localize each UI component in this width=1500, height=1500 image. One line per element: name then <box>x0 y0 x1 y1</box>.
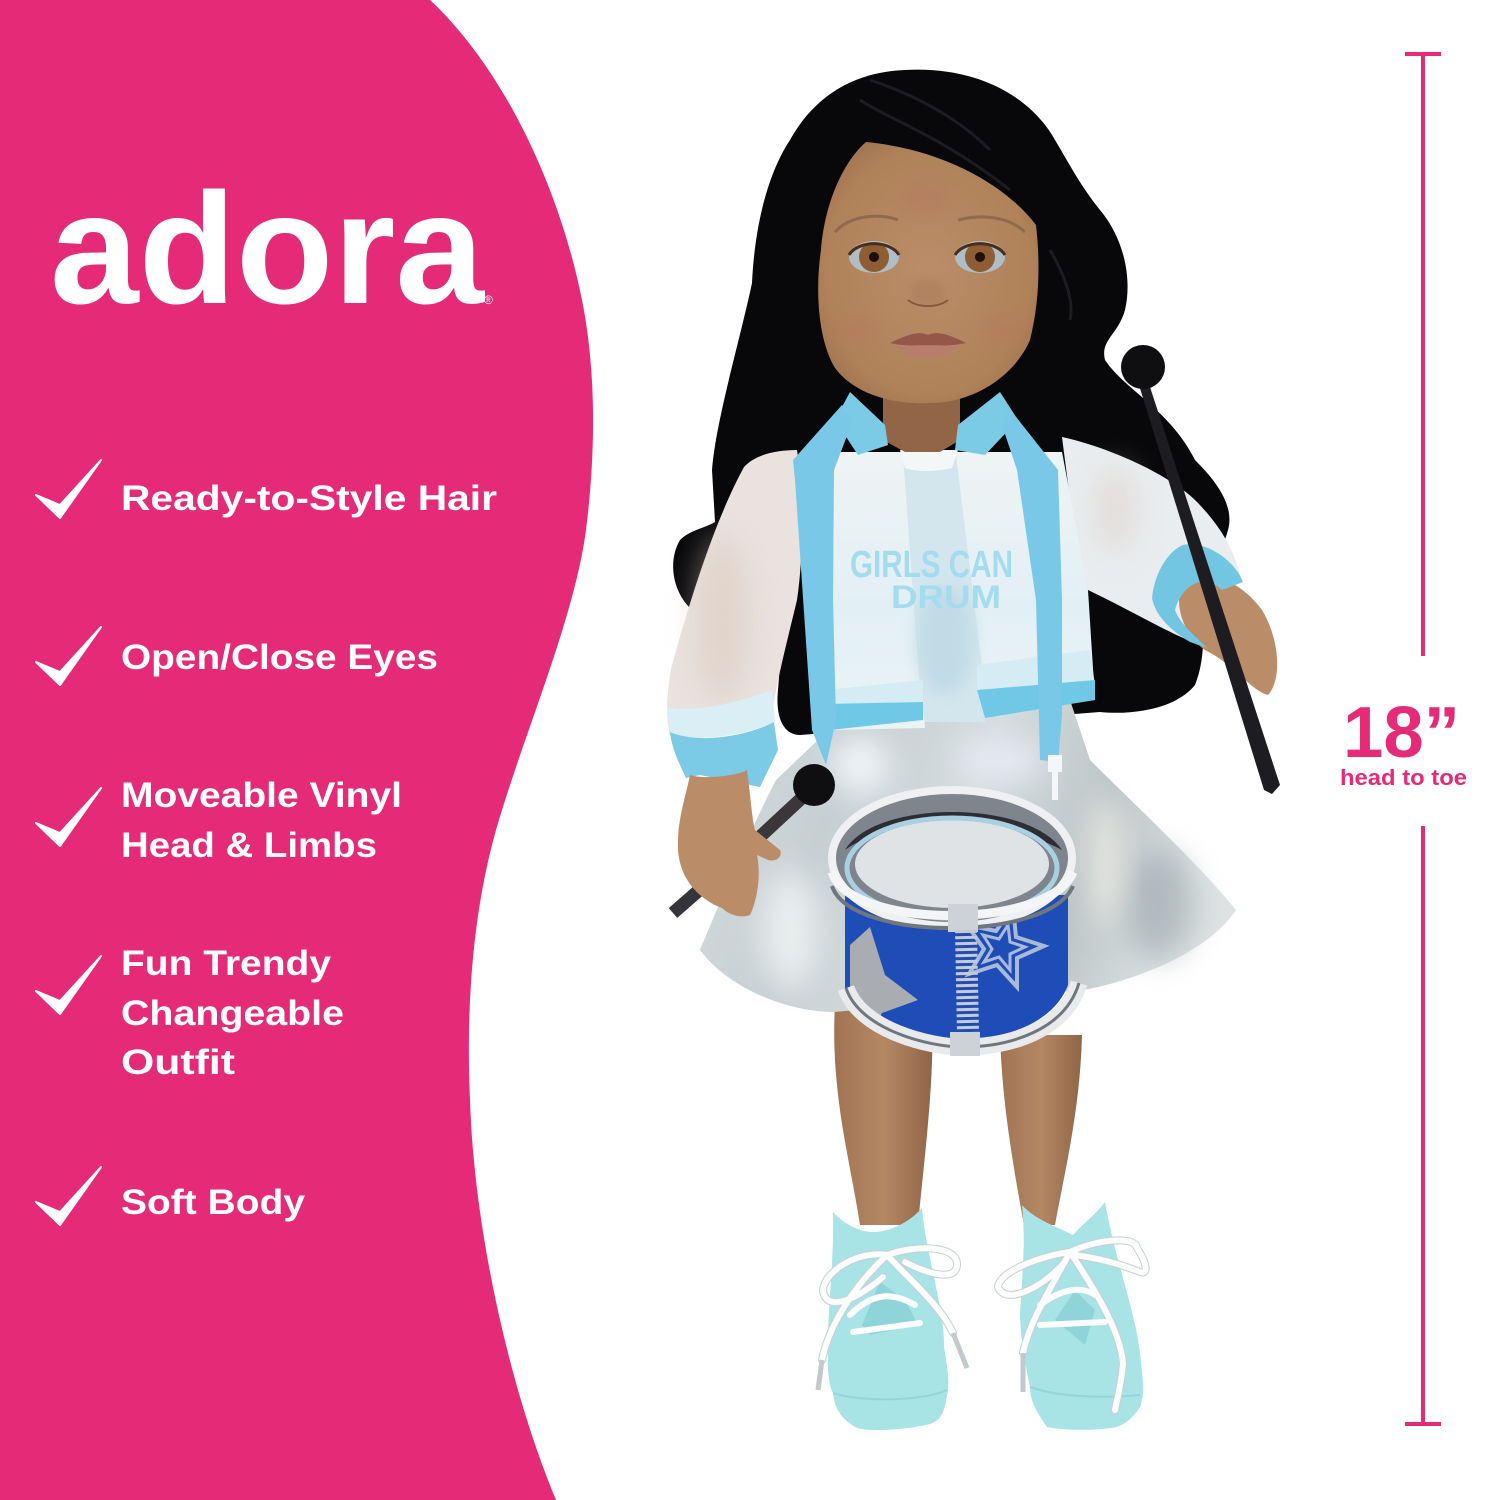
feature: soft body: Soft Body <box>121 1183 306 1222</box>
feature: moveable vinyl head and limbs <box>36 776 402 865</box>
feature: open/close eyes: Open/Close Eyes <box>121 638 438 677</box>
shirt print: GIRLS CAN <box>850 544 1013 586</box>
left cuff <box>670 722 778 787</box>
shirt print: DRUM <box>891 579 1001 615</box>
laces <box>818 1240 1146 1410</box>
brand logo: ® <box>484 293 493 307</box>
left sleeve <box>667 450 802 738</box>
hair <box>673 70 1229 735</box>
jacket hem <box>825 650 1095 730</box>
left leg <box>834 1005 933 1225</box>
right hand <box>1179 577 1277 695</box>
drum <box>832 790 1079 1056</box>
right cuff <box>1152 544 1243 648</box>
collar <box>835 392 1018 455</box>
shirt neckline <box>900 450 958 471</box>
height measure line <box>1405 54 1441 1424</box>
strap clip <box>1048 755 1062 800</box>
height label: head to toe <box>1340 765 1467 790</box>
doll illustration <box>667 70 1280 1430</box>
eyes <box>849 241 1005 273</box>
right leg <box>1000 1035 1082 1225</box>
cheeks <box>834 182 1024 346</box>
feature: moveable vinyl head and limbs: Moveable Vinyl <box>121 776 402 815</box>
feature: fun trendy changeable outfit: Changeable <box>121 994 344 1033</box>
feature: fun trendy changeable outfit: Fun Trendy <box>121 944 332 983</box>
feature: fun trendy changeable outfit: Outfit <box>121 1043 235 1082</box>
nose <box>908 278 948 306</box>
feature: ready-to-style hair: Ready-to-Style Hair <box>121 479 497 518</box>
height label: 18” <box>1343 693 1460 773</box>
left hand <box>678 770 781 916</box>
pink side panel <box>0 0 593 1500</box>
mouth <box>890 333 966 358</box>
shirt print <box>850 544 1013 615</box>
face <box>818 142 1038 403</box>
brand logo: adora <box>50 161 485 337</box>
left boot <box>828 1208 948 1430</box>
feature: moveable vinyl head and limbs: Head & Limbs <box>121 826 377 865</box>
skirt <box>700 700 1236 1012</box>
neck <box>883 385 960 452</box>
right boot <box>1020 1202 1143 1430</box>
right mallet <box>1121 345 1280 794</box>
feature: ready-to-style hair <box>36 460 497 518</box>
feature: fun trendy changeable outfit <box>36 944 344 1082</box>
feature: open/close eyes <box>36 627 438 685</box>
shoulder straps <box>793 405 1062 765</box>
jacket body <box>810 452 1095 730</box>
brows <box>835 216 1025 232</box>
right sleeve <box>1062 437 1240 647</box>
feature: soft body <box>36 1167 306 1225</box>
left mallet <box>673 764 835 913</box>
